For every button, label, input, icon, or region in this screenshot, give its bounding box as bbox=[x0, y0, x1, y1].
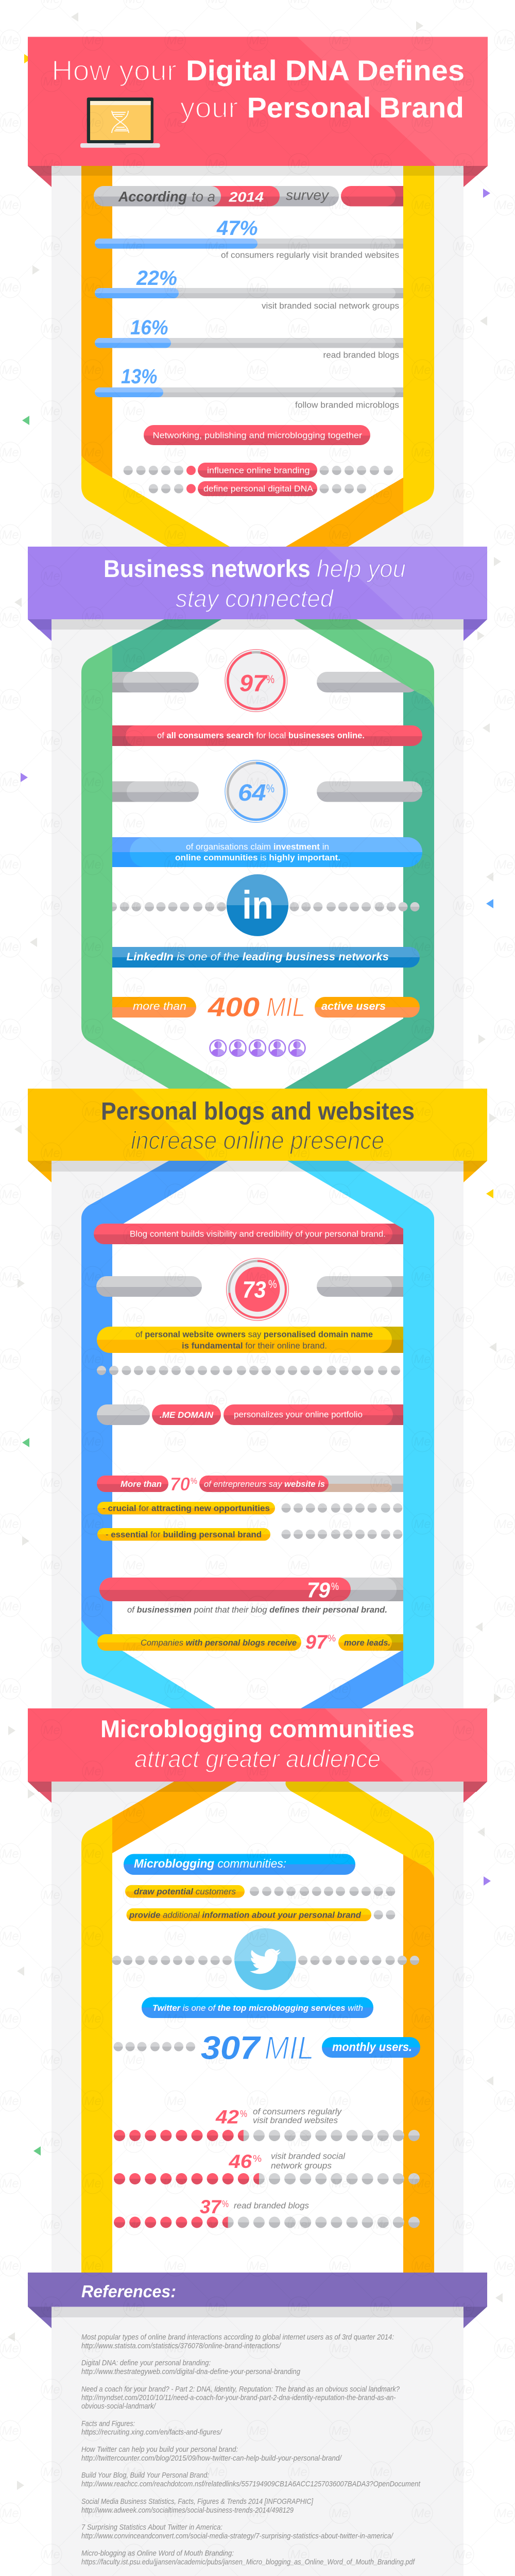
references list: Most popular types of online brand interactions according to global internet users as of 3rd quarter 2014: bbox=[81, 2333, 394, 2342]
interior white area bbox=[112, 166, 403, 547]
ribbon: right cyan strip bbox=[287, 1161, 434, 1686]
bar: .ME domain: .ME DOMAIN bbox=[160, 1410, 214, 1420]
ribbon: bottom-left cyan chevron bbox=[81, 1620, 215, 1708]
stat: 79% of businessmen: 79 bbox=[307, 1578, 331, 1602]
stat: 400 MIL active users: more than bbox=[133, 1001, 186, 1012]
stat: 70% of entrepreneurs: % bbox=[191, 1476, 197, 1486]
stat: 64% row bbox=[98, 760, 422, 822]
stat: 79% of businessmen bbox=[99, 1578, 407, 1615]
stat: 400 MIL active users: active users bbox=[321, 1001, 386, 1012]
stat: 46% dots: 46 bbox=[228, 2151, 252, 2172]
interior white area bbox=[112, 619, 403, 1089]
stat: 37% dots: 37 bbox=[200, 2196, 222, 2217]
stat: 307 MIL monthly users: monthly users. bbox=[332, 2040, 412, 2054]
references list bbox=[81, 2333, 421, 2576]
stat: 47%: of consumers regularly visit branded websites bbox=[221, 250, 399, 260]
dotted row: define personal digital DNA: define personal digital DNA bbox=[203, 484, 313, 494]
stat: 22%: 22% bbox=[136, 267, 177, 290]
references list: Facts and Figures: bbox=[81, 2419, 135, 2428]
ribbon: right orange strip bbox=[403, 1854, 434, 2273]
title banner bbox=[28, 37, 488, 187]
bar: all consumers search: of all consumers search for local businesses online. bbox=[157, 731, 365, 740]
survey heading bars: to a bbox=[192, 189, 215, 205]
survey heading bars: According bbox=[118, 189, 187, 205]
ribbon: left green strip and chevron bbox=[81, 646, 232, 1089]
stat: 73% row: 73 bbox=[243, 1277, 266, 1302]
dotted row: define personal digital DNA bbox=[149, 481, 366, 496]
banner: business networks bbox=[28, 547, 487, 641]
dotted line bbox=[112, 1956, 419, 1965]
bar: organisations investment: online communities is highly important. bbox=[175, 853, 340, 862]
dotted row: influence online branding bbox=[124, 463, 393, 478]
stat: 46% dots: visit branded social bbox=[271, 2151, 346, 2161]
banner: references: References: bbox=[81, 2282, 176, 2301]
stat: 97% row bbox=[98, 648, 419, 713]
dotted row: influence online branding: influence online branding bbox=[207, 466, 310, 475]
stat: 97% row: % bbox=[266, 673, 274, 686]
stat: 46% dots: network groups bbox=[271, 2161, 332, 2171]
heading text: increase online presence bbox=[131, 1127, 384, 1155]
bar: microblogging communities bbox=[124, 1854, 355, 1875]
bar: essential for personal brand: - essential for building personal brand bbox=[106, 1530, 262, 1539]
references list: http://www.adweek.com/socialtimes/social-business-trends-2014/498129 bbox=[81, 2506, 294, 2515]
stat: 47%: 47% bbox=[216, 217, 258, 240]
references list: http://twittercounter.com/blog/2015/09/how-twitter-can-help-build-your-personal-brand/ bbox=[81, 2454, 342, 2463]
bar: blog content: Blog content builds visibility and credibility of your personal brand. bbox=[130, 1229, 386, 1239]
stat: 97% more leads: 97 bbox=[305, 1632, 328, 1653]
title text: How your bbox=[52, 54, 177, 87]
background panel bbox=[52, 166, 464, 2576]
references list: 7 Surprising Statistics About Twitter in America: bbox=[81, 2523, 222, 2532]
stat: 307 MIL monthly users bbox=[114, 2030, 420, 2066]
stat: 70% of entrepreneurs: of entrepreneurs say website is bbox=[204, 1480, 325, 1489]
heading text: stay connected bbox=[176, 585, 334, 612]
stat: 97% more leads: % bbox=[328, 1633, 336, 1643]
stat: 42% dots: of consumers regularly bbox=[253, 2107, 342, 2116]
stat: 79% of businessmen: % bbox=[331, 1581, 339, 1592]
references list: http://www.thestrategyweb.com/digital-dna-define-your-personal-branding bbox=[81, 2367, 301, 2376]
ribbon: right yellow strip bbox=[403, 166, 434, 513]
section 3: personal blogs and websites bbox=[52, 1161, 464, 1708]
heading text: Business networks bbox=[104, 555, 311, 582]
stat: 37% dots: read branded blogs bbox=[234, 2201, 309, 2210]
references list: Micro-blogging as Online Word of Mouth Branding: bbox=[81, 2549, 234, 2558]
bar: LinkedIn leading networks: LinkedIn is one of the leading business networks bbox=[127, 951, 389, 963]
bar: crucial for opportunities: - crucial for attracting new opportunities bbox=[102, 1504, 270, 1513]
title text bbox=[52, 54, 465, 124]
icons: users bbox=[210, 1040, 305, 1056]
stat: 16%: 16% bbox=[130, 316, 168, 339]
references list: http://www.convinceandconvert.com/social-media-strategy/7-surprising-statistics-about-twitter-in-america/ bbox=[81, 2532, 394, 2540]
references list: How Twitter can help you build your personal brand: bbox=[81, 2445, 238, 2454]
bar: crucial for opportunities bbox=[97, 1502, 402, 1515]
references list: http://www.reachcc.com/reachdotcom.nsf/relatedlinks/557194909CB1A6ACC1257036007BADA3?OpenDocument bbox=[81, 2480, 421, 2488]
heading text bbox=[101, 1098, 415, 1155]
stat: 64% row: % bbox=[266, 782, 274, 795]
interior white area bbox=[112, 1161, 403, 1708]
stat: 42% dots bbox=[114, 2106, 420, 2141]
references list: Build Your Blog, Build Your Personal Brand: bbox=[81, 2471, 209, 2480]
ribbon: top-left teal diagonal bbox=[112, 619, 221, 683]
bar: Twitter top service bbox=[142, 1997, 373, 2018]
icon: laptop with DNA bbox=[80, 97, 160, 148]
bar: provide additional information bbox=[127, 1908, 395, 1921]
references list: http://myndset.com/2010/10/11/need-a-coach-for-your-brand-part-2-dna-identity-reputation-the-brand-as-an- bbox=[81, 2394, 396, 2402]
banner: microblogging bbox=[28, 1708, 487, 1803]
stat: 307 MIL monthly users: 307 bbox=[201, 2030, 261, 2066]
ribbon: left yellow chevron bbox=[81, 456, 230, 547]
stat: 37% dots: % bbox=[222, 2199, 229, 2209]
stat: 400 MIL active users: 400 bbox=[208, 992, 260, 1022]
callout: networking together: Networking, publishing and microblogging together bbox=[152, 431, 363, 440]
stat: 97% more leads: more leads. bbox=[344, 1638, 390, 1648]
references list: https://faculty.ist.psu.edu/jjansen/academic/pubs/jansen_Micro_blogging_as_Online_Word_of_Mouth_Branding.pdf bbox=[81, 2557, 416, 2567]
stat: 70% of entrepreneurs bbox=[97, 1473, 407, 1495]
stat: 16% bbox=[95, 316, 407, 360]
stat: 70% of entrepreneurs: More than bbox=[121, 1480, 162, 1489]
interior white area bbox=[112, 1782, 403, 2273]
ribbon: right teal strip and chevron bbox=[284, 684, 434, 1089]
ribbon: right orange chevron bbox=[286, 478, 403, 547]
stat: 42% dots: visit branded websites bbox=[253, 2116, 338, 2125]
ribbon: top-left orange diagonal bbox=[112, 1782, 237, 1853]
stat: 73% row bbox=[96, 1258, 407, 1320]
bar: microblogging communities: Microblogging communities: bbox=[134, 1857, 286, 1870]
bar: provide additional information: provide additional information about your personal brand bbox=[129, 1910, 362, 1920]
survey heading bars: 2014 bbox=[228, 190, 264, 205]
stat: 400 MIL active users: MIL bbox=[266, 992, 305, 1022]
references list: obvious-social-landmark/ bbox=[81, 2402, 157, 2411]
stat: 46% dots bbox=[114, 2151, 420, 2184]
references list: Need a coach for your brand? - Part 2: DNA, Identity, Reputation: The brand as an obvious social landmark? bbox=[81, 2385, 400, 2394]
stat: 42% dots: 42 bbox=[215, 2106, 239, 2127]
section 2: business networks bbox=[52, 619, 464, 1089]
stat: 70% of entrepreneurs: 70 bbox=[170, 1473, 190, 1495]
stat: 37% dots bbox=[114, 2196, 420, 2228]
stat: 22%: visit branded social network groups bbox=[262, 301, 399, 311]
ribbon: top-right yellow diagonal bbox=[285, 1782, 434, 1878]
references list: http://www.statista.com/statistics/376078/online-brand-interactions/ bbox=[81, 2342, 282, 2350]
stat: 400 MIL active users bbox=[98, 992, 420, 1022]
stat: 97% more leads: Companies with personal blogs receive bbox=[141, 1638, 297, 1648]
stat: 13% bbox=[95, 365, 407, 410]
heading text: help you bbox=[317, 555, 406, 582]
banner: personal blogs bbox=[28, 1089, 487, 1182]
ribbon: left yellow strip bbox=[81, 1817, 112, 2273]
bar: LinkedIn leading networks bbox=[98, 947, 420, 968]
stat: 47% bbox=[95, 217, 407, 260]
stat: 42% dots: % bbox=[240, 2109, 247, 2119]
section 1: online branding survey bbox=[52, 166, 464, 547]
stat: 13%: follow branded microblogs bbox=[295, 401, 399, 410]
heading text bbox=[104, 555, 406, 612]
stat: 46% dots: % bbox=[253, 2154, 262, 2164]
stat: 97% more leads bbox=[97, 1632, 407, 1653]
bar: essential for personal brand bbox=[97, 1528, 402, 1540]
bar: .ME domain bbox=[97, 1404, 407, 1425]
bar: organisations investment bbox=[98, 837, 422, 867]
icon: LinkedIn: in bbox=[242, 883, 273, 927]
references list: Social Media Business Statistics, Facts, Figures & Trends 2014 [INFOGRAPHIC] bbox=[81, 2497, 314, 2506]
bar: .ME domain: personalizes your online portfolio bbox=[234, 1410, 363, 1419]
heading text: Microblogging communities bbox=[100, 1715, 415, 1742]
bar: domain name fundamental: of personal website owners say personalised domain name bbox=[135, 1330, 373, 1340]
bar: domain name fundamental: is fundamental for their online brand. bbox=[182, 1342, 327, 1351]
icon: LinkedIn bbox=[227, 874, 288, 936]
icon: Twitter bird bbox=[234, 1928, 296, 1990]
survey heading bars: survey bbox=[286, 187, 330, 203]
stat: 13%: 13% bbox=[121, 365, 158, 388]
title text: Digital DNA Defines bbox=[186, 54, 465, 87]
title text: Personal Brand bbox=[247, 91, 464, 124]
dotted line bbox=[97, 1366, 400, 1375]
bar: all consumers search bbox=[98, 725, 422, 746]
bar: domain name fundamental bbox=[97, 1327, 407, 1353]
bar: blog content bbox=[94, 1224, 407, 1244]
ribbon: left orange strip bbox=[81, 166, 112, 478]
references list: https://recruiting.xing.com/en/facts-and-figures/ bbox=[81, 2428, 222, 2437]
ribbon: top-right green diagonal bbox=[294, 619, 434, 707]
banner: references bbox=[28, 2273, 487, 2328]
stat: 73% row: % bbox=[268, 1278, 277, 1291]
ribbon: left blue strip bbox=[81, 1161, 228, 1645]
callout: networking together bbox=[144, 425, 370, 445]
references list: Digital DNA: define your personal branding: bbox=[81, 2359, 211, 2367]
bar: draw potential customers: draw potential customers bbox=[134, 1887, 236, 1896]
dotted line bbox=[108, 902, 419, 911]
stat: 64% row: 64 bbox=[238, 779, 266, 806]
stat: 79% of businessmen: of businessmen point that their blog defines their personal brand. bbox=[127, 1605, 387, 1615]
heading text bbox=[100, 1715, 415, 1772]
bar: Twitter top service: Twitter is one of the top microblogging services with bbox=[152, 2003, 363, 2013]
stat: 307 MIL monthly users: MIL bbox=[264, 2030, 314, 2066]
bar: organisations investment: of organisations claim investment in bbox=[186, 842, 329, 852]
ribbon: bottom-right blue chevron bbox=[301, 1650, 403, 1708]
bar: draw potential customers bbox=[125, 1885, 395, 1898]
heading text: Personal blogs and websites bbox=[101, 1098, 415, 1125]
stat: 16%: read branded blogs bbox=[323, 350, 399, 360]
stat: 97% row: 97 bbox=[239, 670, 267, 697]
section 4: microblogging communities bbox=[52, 1782, 464, 2273]
title text: your bbox=[180, 91, 238, 124]
survey heading bars bbox=[94, 186, 407, 206]
stat: 22% bbox=[95, 267, 407, 311]
heading text: attract greater audience bbox=[134, 1745, 381, 1772]
